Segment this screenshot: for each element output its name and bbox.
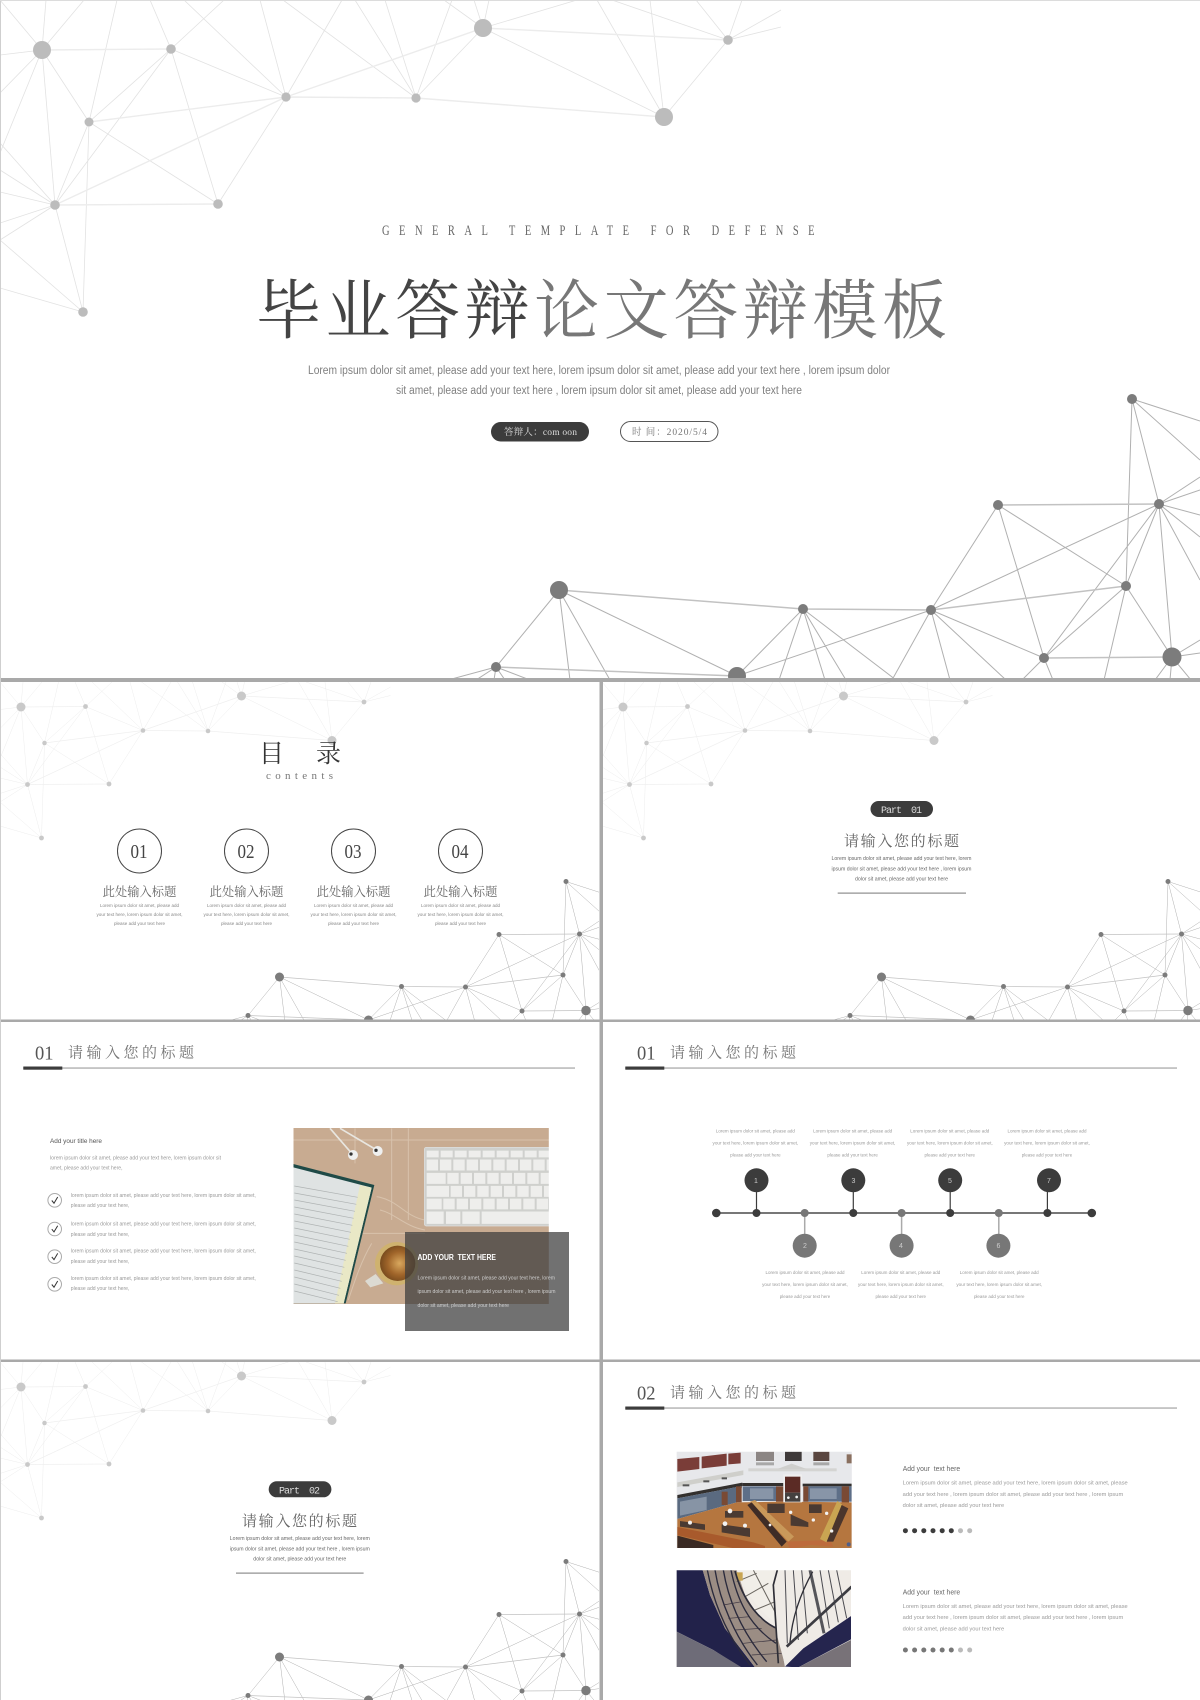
contents item 01: 此处输入标题 [103, 884, 176, 899]
contents item 04: 此处输入标题 [424, 884, 497, 899]
timeline step 1: Lorem ipsum dolor sit amet, please add [716, 1128, 795, 1134]
timeline step 6: Lorem ipsum dolor sit amet, please add [960, 1270, 1039, 1275]
timeline step 7: Lorem ipsum dolor sit amet, please add [1008, 1128, 1087, 1134]
panel: cover slide [0, 0, 1200, 685]
contents item 03: 03 [344, 841, 362, 863]
network decoration: bottom right [224, 1559, 600, 1700]
panel: part 02 divider slide [0, 1362, 600, 1700]
timeline step 6: please add your text here [974, 1294, 1025, 1299]
section header [625, 1382, 1177, 1410]
part 02 description: ipsum dolor sit amet, please add your text here , lorem ipsum [230, 1546, 370, 1552]
contents item 03 [310, 829, 396, 926]
part 01 description: Lorem ipsum dolor sit amet, please add your text here, lorem [832, 856, 972, 862]
timeline step 3: 3 [852, 1178, 856, 1185]
timeline step 2: please add your text here [780, 1294, 831, 1299]
contents item 04: 04 [452, 841, 468, 863]
section header: 请输入您的标题 [68, 1044, 194, 1062]
timeline step 5: Lorem ipsum dolor sit amet, please add [910, 1128, 990, 1134]
photo caption overlay: ipsum dolor sit amet, please add your text here , lorem ipsum [418, 1289, 556, 1295]
timeline step 2: Lorem ipsum dolor sit amet, please add [766, 1270, 845, 1275]
timeline step 2: 2 [803, 1243, 807, 1250]
network decoration: bottom right [448, 394, 1200, 685]
part 02 pill: Part 02 [279, 1486, 320, 1497]
part 01 rule [838, 893, 966, 894]
part 01 description: dolor sit amet, please add your text here [855, 876, 948, 882]
checklist item 2: please add your text here, [71, 1232, 129, 1238]
photo caption overlay: dolor sit amet, please add your text here [418, 1303, 509, 1309]
item text 2: Add your text here [903, 1590, 960, 1596]
part 01 pill: Part 01 [881, 806, 922, 817]
network decoration: top left [602, 682, 992, 840]
panel: section 01 content slide with photo [23, 1042, 575, 1331]
contents item 03: please add your text here [328, 921, 379, 926]
cover eyebrow: GENERAL TEMPLATE FOR DEFENSE [382, 221, 815, 238]
checklist item 1: please add your text here, [71, 1203, 129, 1209]
timeline step 5: 5 [948, 1178, 952, 1185]
checklist item 3 [48, 1248, 256, 1265]
timeline step 2: your text here, lorem ipsum dolor sit amet, [762, 1282, 848, 1287]
intro text: lorem ipsum dolor sit amet, please add your text here, lorem ipsum dolor sit [50, 1156, 222, 1162]
section header: 请输入您的标题 [670, 1384, 796, 1402]
checklist item 1 [48, 1193, 256, 1209]
network decoration: top left [0, 682, 390, 840]
part 02 description: dolor sit amet, please add your text here [253, 1556, 347, 1562]
part 01 description: ipsum dolor sit amet, please add your text here , lorem ipsum [832, 866, 972, 872]
checklist item 4: lorem ipsum dolor sit amet, please add your text here, lorem ipsum dolor sit amet, [71, 1276, 256, 1282]
contents item 04: please add your text here [435, 921, 486, 926]
part 02 pill [269, 1481, 331, 1497]
timeline step 7 [1004, 1128, 1090, 1217]
cover description: Lorem ipsum dolor sit amet, please add your text here, lorem ipsum dolor sit amet, please add your text here , lorem ipsum dolor [308, 365, 890, 377]
timeline axis [712, 1209, 1096, 1217]
network decoration: top left [0, 1362, 390, 1520]
cover description [308, 365, 890, 397]
timeline step 3: your text here, lorem ipsum dolor sit amet, [810, 1140, 895, 1146]
timeline step 3: Lorem ipsum dolor sit amet, please add [813, 1128, 893, 1134]
photo caption overlay: ADD YOUR TEXT HERE [418, 1253, 497, 1262]
timeline step 4: 4 [899, 1243, 903, 1250]
checklist item 4 [48, 1276, 256, 1292]
contents item 01: please add your text here [114, 921, 165, 926]
contents heading: 目 录 [259, 741, 341, 768]
section header [23, 1042, 575, 1070]
contents item 02: 02 [238, 841, 254, 863]
timeline step 4 [858, 1209, 944, 1299]
intro text: amet, please add your text here, [50, 1166, 122, 1172]
photo caption overlay: Lorem ipsum dolor sit amet, please add your text here, lorem [418, 1276, 555, 1282]
timeline step 2 [762, 1209, 848, 1299]
timeline step 6: your text here, lorem ipsum dolor sit amet, [956, 1282, 1042, 1287]
contents item 02: Lorem ipsum dolor sit amet, please add [207, 903, 286, 908]
section header: 02 [637, 1382, 656, 1404]
contents item 04: your text here, lorem ipsum dolor sit amet, [418, 912, 504, 917]
checklist item 3: lorem ipsum dolor sit amet, please add your text here, lorem ipsum dolor sit amet, [71, 1248, 256, 1254]
timeline step 1: 1 [754, 1178, 758, 1185]
rating dots 2 [903, 1648, 972, 1652]
photo caption overlay [405, 1232, 569, 1331]
item text 2 [903, 1590, 1128, 1632]
part 02 heading: 请输入您的标题 [242, 1512, 357, 1530]
item text 1: dolor sit amet, please add your text here [903, 1503, 1004, 1509]
contents item 01: 01 [130, 841, 148, 863]
part 02 description [230, 1536, 370, 1562]
timeline step 6: 6 [997, 1243, 1001, 1250]
section header: 01 [637, 1042, 656, 1064]
photo: desk with notebook, keyboard, earphones and coffee [292, 1127, 558, 1305]
timeline step 5 [907, 1128, 993, 1217]
cover description: sit amet, please add your text here , lorem ipsum dolor sit amet, please add your text here [396, 385, 802, 397]
photo: library reading room [677, 1451, 852, 1549]
timeline step 3 [810, 1128, 895, 1217]
section header: 01 [35, 1042, 54, 1064]
checklist item 2 [48, 1222, 256, 1238]
timeline step 7: 7 [1047, 1178, 1051, 1185]
panel: part 01 divider slide [602, 682, 1200, 1024]
timeline step 4: your text here, lorem ipsum dolor sit amet, [858, 1282, 944, 1287]
contents item 03: your text here, lorem ipsum dolor sit amet, [310, 912, 396, 917]
contents item 03: Lorem ipsum dolor sit amet, please add [314, 903, 393, 908]
item text 1: Lorem ipsum dolor sit amet, please add your text here, lorem ipsum dolor sit amet, please [903, 1480, 1128, 1486]
checklist item 4: please add your text here, [71, 1286, 129, 1292]
part 01 description [832, 856, 972, 882]
timeline step 6 [956, 1209, 1042, 1299]
part 02 rule [236, 1573, 364, 1574]
contents item 01: your text here, lorem ipsum dolor sit amet, [96, 912, 182, 917]
photo: curved library windows [676, 1570, 852, 1667]
cover title: 毕业答辩论文答辩模板 [256, 276, 947, 348]
panel: contents slide [0, 682, 600, 1024]
checklist item 3: please add your text here, [71, 1259, 129, 1265]
contents item 04 [418, 829, 504, 926]
contents subheading: contents [266, 770, 333, 782]
rating dots 1 [903, 1528, 972, 1533]
part 02 description: Lorem ipsum dolor sit amet, please add your text here, lorem [230, 1536, 370, 1542]
checklist item 2: lorem ipsum dolor sit amet, please add your text here, lorem ipsum dolor sit amet, [71, 1222, 256, 1228]
contents item 01 [96, 829, 182, 926]
timeline step 3: please add your text here [827, 1152, 878, 1158]
contents item 01: Lorem ipsum dolor sit amet, please add [100, 903, 179, 908]
network decoration: bottom right [224, 879, 600, 1024]
timeline step 4: Lorem ipsum dolor sit amet, please add [861, 1270, 941, 1275]
date pill: 时 间：2020/5/4 [632, 426, 707, 438]
timeline step 1 [713, 1128, 798, 1217]
contents item 03: 此处输入标题 [317, 884, 390, 899]
network decoration: top left [0, 0, 781, 317]
timeline step 5: please add your text here [925, 1152, 975, 1158]
checklist item 1: lorem ipsum dolor sit amet, please add your text here, lorem ipsum dolor sit amet, [71, 1193, 256, 1199]
contents item 02: 此处输入标题 [210, 884, 283, 899]
intro text [50, 1138, 222, 1172]
timeline step 7: your text here, lorem ipsum dolor sit amet, [1004, 1140, 1090, 1146]
item text 2: add your text here , lorem ipsum dolor sit amet, please add your text here , lorem ipsum [903, 1615, 1123, 1621]
part 01 pill [870, 801, 933, 817]
section header [625, 1042, 1177, 1070]
network decoration: bottom right [826, 879, 1200, 1024]
date pill [620, 422, 718, 442]
item text 1: Add your text here [903, 1466, 960, 1473]
contents item 02: please add your text here [221, 921, 272, 926]
timeline step 1: please add your text here [730, 1152, 781, 1158]
timeline step 5: your text here, lorem ipsum dolor sit amet, [907, 1140, 993, 1146]
intro text: Add your title here [50, 1138, 102, 1145]
item text 1: add your text here , lorem ipsum dolor sit amet, please add your text here , lorem ipsum [903, 1492, 1123, 1498]
timeline step 1: your text here, lorem ipsum dolor sit amet, [713, 1140, 798, 1146]
part 01 heading: 请输入您的标题 [844, 832, 959, 850]
contents item 02 [204, 829, 290, 926]
presenter pill [491, 422, 589, 442]
contents item 04: Lorem ipsum dolor sit amet, please add [421, 903, 500, 908]
item text 2: dolor sit amet, please add your text here [903, 1626, 1004, 1632]
item text 1 [903, 1466, 1128, 1509]
presenter pill: 答辩人：com oon [504, 426, 577, 438]
panel: section 01 timeline slide [625, 1042, 1177, 1299]
item text 2: Lorem ipsum dolor sit amet, please add your text here, lorem ipsum dolor sit amet, please [903, 1604, 1128, 1610]
timeline step 7: please add your text here [1022, 1152, 1073, 1158]
contents item 02: your text here, lorem ipsum dolor sit amet, [204, 912, 290, 917]
panel: section 02 content slide with photos [625, 1382, 1177, 1667]
section header: 请输入您的标题 [670, 1044, 796, 1062]
timeline step 4: please add your text here [876, 1294, 926, 1299]
